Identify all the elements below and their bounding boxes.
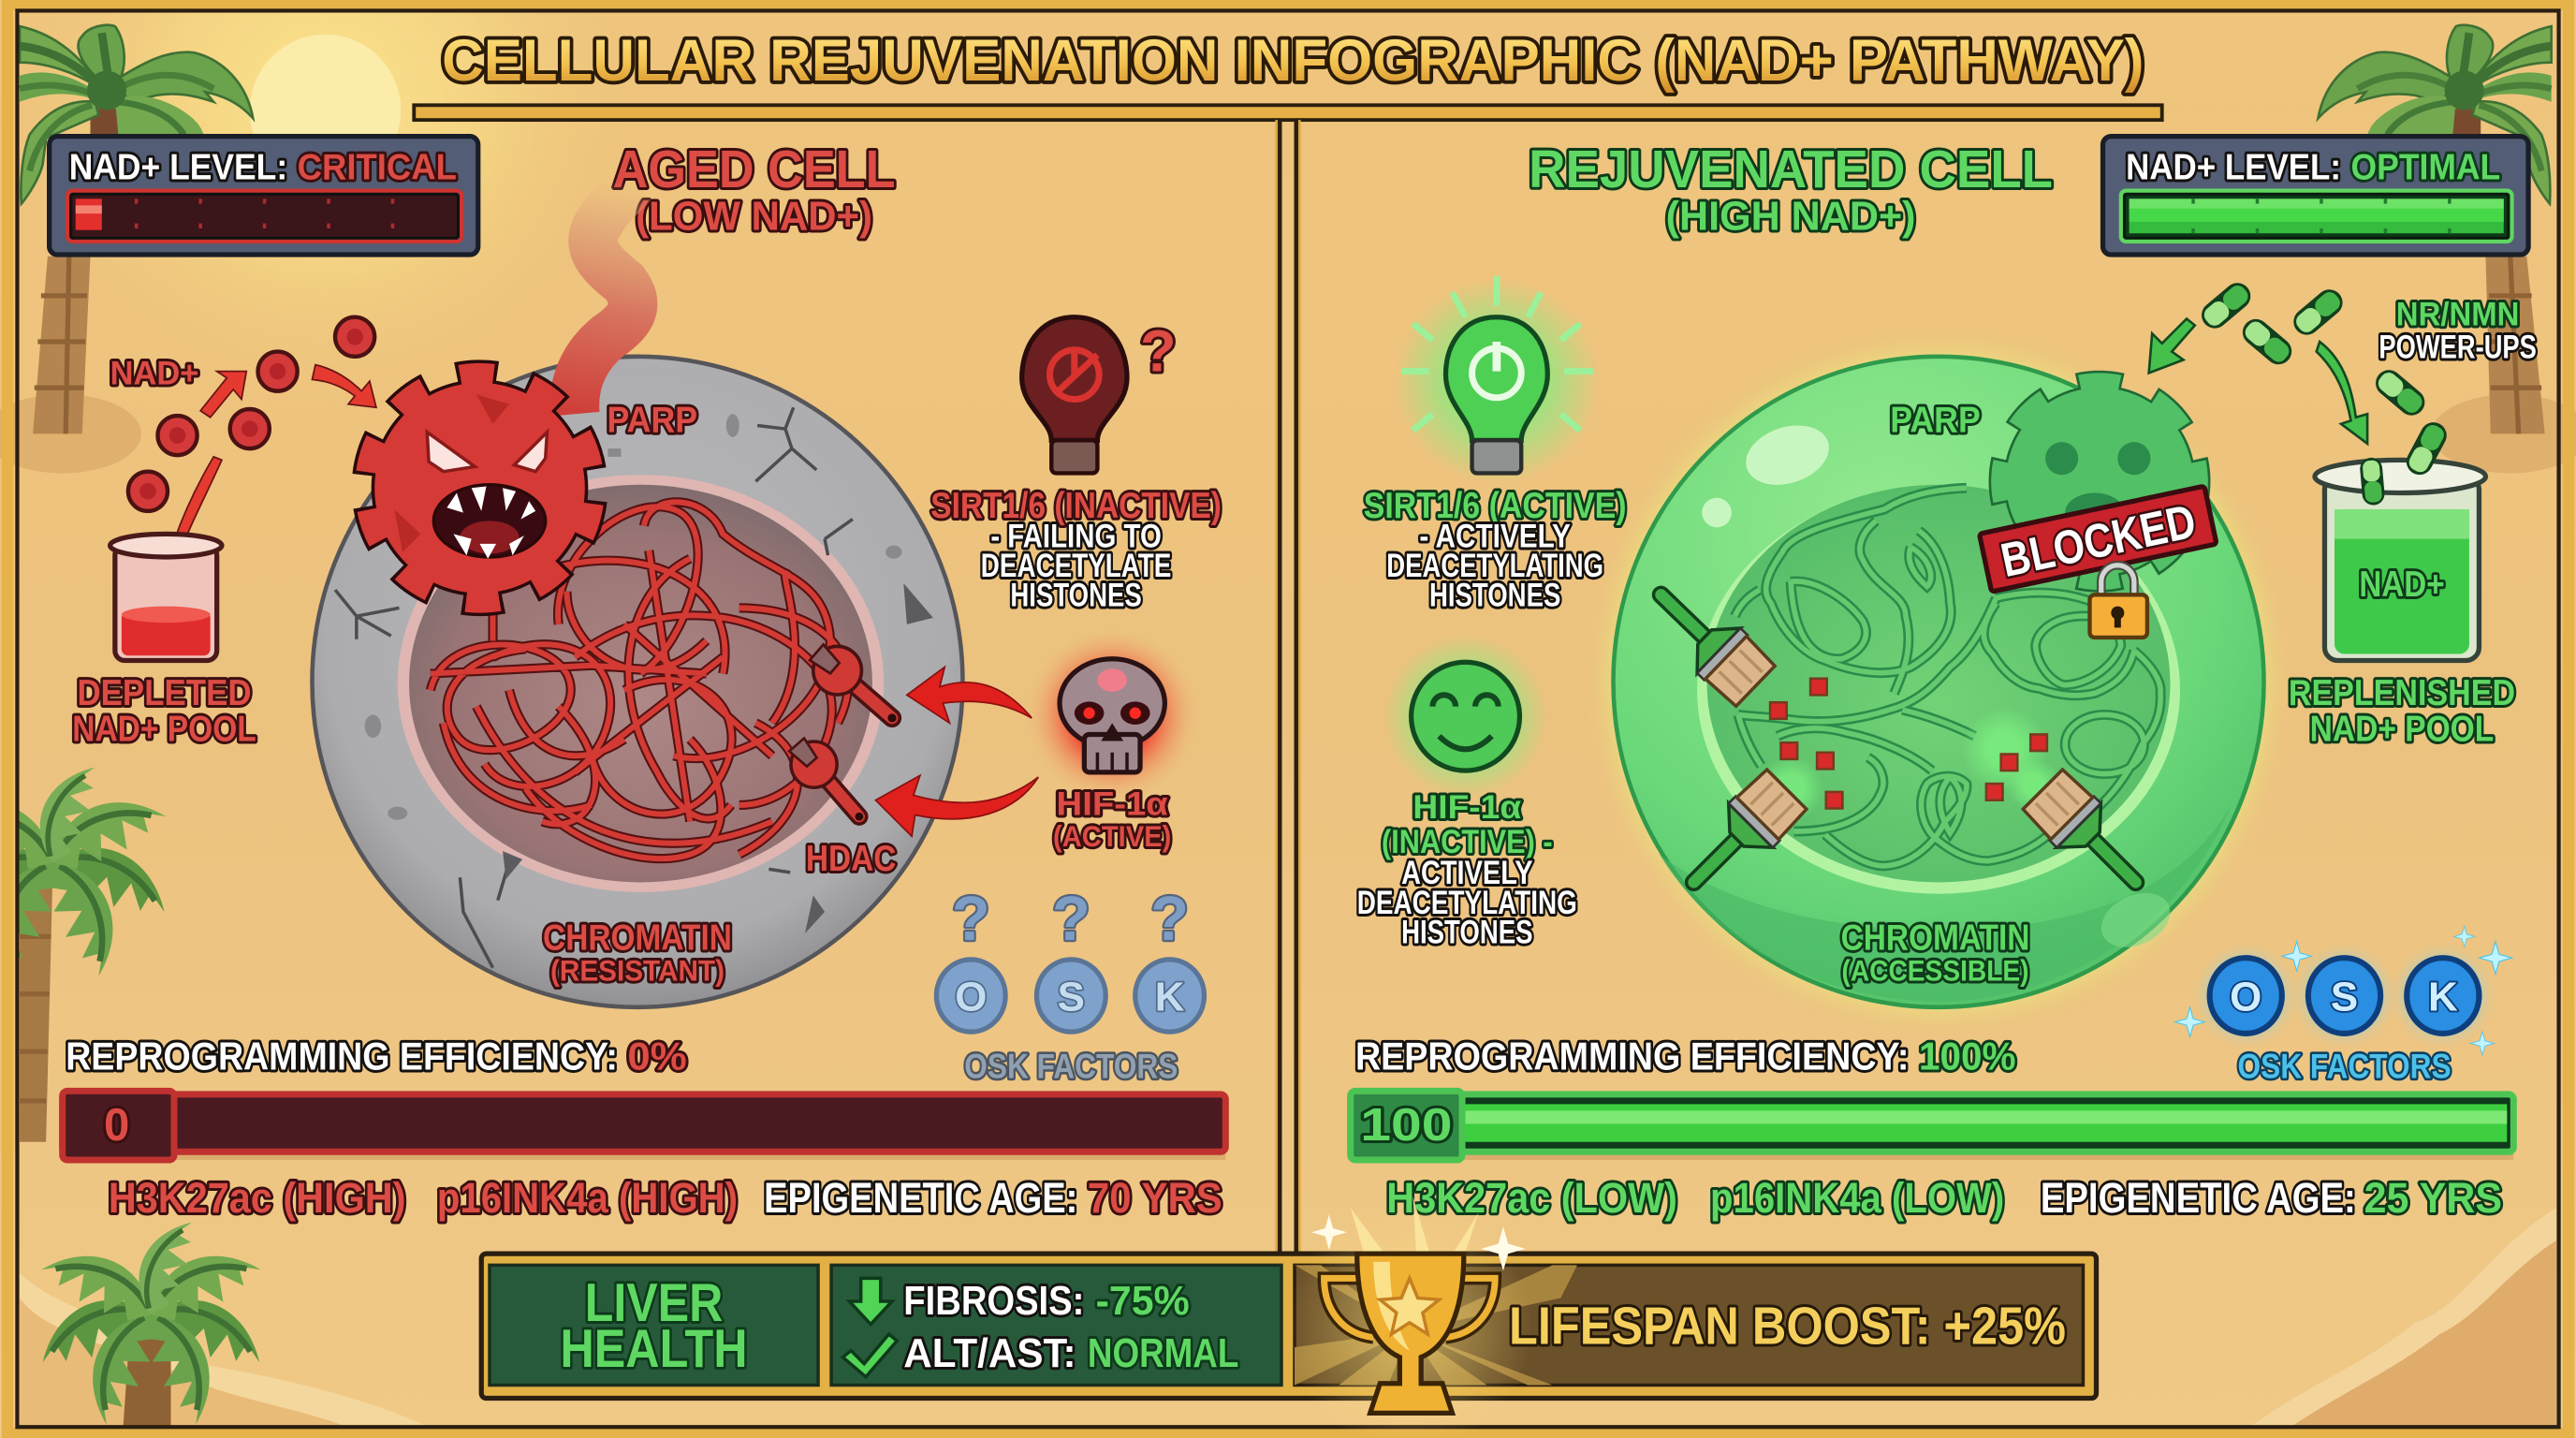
text block: SIRT1/6 active: HISTONES <box>1429 578 1560 614</box>
text block: HIF-1a inactive <box>1357 789 1577 950</box>
icon: replenished beaker <box>2315 418 2485 661</box>
rejuvenated biomarkers: EPIGENETIC AGE: <box>2041 1174 2356 1222</box>
lifespan boost box <box>1286 1204 2083 1438</box>
reprogramming efficiency: 100% <box>1351 1034 2513 1160</box>
label: replenished NAD+ pool: REPLENISHED <box>2289 673 2515 713</box>
panel: bottom results bar <box>481 1196 2097 1438</box>
lifespan boost box: LIFESPAN BOOST: +25% <box>1509 1297 2066 1356</box>
NAD+ level gauge: critical: NAD+ LEVEL: <box>69 147 287 187</box>
label: HDAC: HDAC <box>806 839 896 879</box>
icon: depleted beaker <box>110 534 222 661</box>
rejuvenated biomarkers: H3K27ac (LOW) <box>1386 1174 1677 1222</box>
arrow: HIF-1a to lower wrench <box>875 775 1038 836</box>
label: NR/NMN power-ups: POWER-UPS <box>2378 330 2537 366</box>
liver metrics box <box>831 1265 1281 1385</box>
label: replenished NAD+ pool: NAD+ POOL <box>2310 710 2494 750</box>
liver health box <box>490 1265 818 1385</box>
OSK factors locked: ? <box>952 885 990 954</box>
text block: HIF-1a inactive: HIF-1α <box>1412 789 1522 826</box>
icon: wrench HDAC lower <box>780 729 879 835</box>
icon: glowing lightbulb SIRT1/6 active <box>1395 276 1599 483</box>
icon: NR/NMN pills and arrows <box>2149 278 2430 444</box>
label: replenished NAD+ pool <box>2289 673 2515 750</box>
reprogramming efficiency: 0%: REPROGRAMMING EFFICIENCY: <box>66 1034 618 1078</box>
rejuvenated biomarkers <box>1386 1174 2502 1222</box>
liver health box: HEALTH <box>560 1319 748 1379</box>
bar frame <box>481 1254 2097 1399</box>
PARP monster gear <box>368 376 592 600</box>
label: chromatin accessible: CHROMATIN <box>1841 917 2029 958</box>
icon: histone brushes <box>1639 572 2158 904</box>
rejuvenated cell heading: REJUVENATED CELL <box>1529 139 2053 198</box>
label: HIF-1a active: (ACTIVE) <box>1053 819 1171 853</box>
reprogramming efficiency: 0% <box>63 1034 1225 1160</box>
icon: smiley HIF-1a inactive <box>1383 634 1547 799</box>
icon: trophy with sparkles <box>1311 1196 1526 1413</box>
icon: skull HIF-1a active <box>1023 626 1201 803</box>
accessible cell: green sphere <box>1580 324 2297 1040</box>
resistant cell: cracked stone <box>312 357 962 1007</box>
label: depleted NAD+ pool: DEPLETED <box>77 673 252 713</box>
panel: rejuvenated cell <box>1351 137 2537 1222</box>
smoke rising from PARP <box>575 184 633 414</box>
icon: padlock <box>2089 565 2147 638</box>
OSK factors locked <box>936 885 1204 1085</box>
OSK factors active: S <box>2331 974 2358 1020</box>
text block: SIRT1/6 active: DEACETYLATING <box>1386 548 1603 584</box>
liver metrics box: NORMAL <box>1088 1330 1238 1376</box>
rejuvenated cell heading: (HIGH NAD+) <box>1666 194 1915 240</box>
label: HIF-1a active <box>1053 785 1171 853</box>
NAD+ molecules being consumed <box>110 317 376 572</box>
text block: HIF-1a inactive: (INACTIVE) - <box>1382 824 1553 860</box>
text block: SIRT1/6 active: - ACTIVELY <box>1419 518 1571 554</box>
palm tree: top right <box>2318 25 2552 433</box>
reprogramming efficiency: 100%: 100 <box>1360 1100 1453 1151</box>
NAD+ level gauge: optimal <box>2103 137 2528 255</box>
sparkle glow on chromatin <box>1758 707 2060 822</box>
label: chromatin resistant: (RESISTANT) <box>550 954 724 988</box>
aged biomarkers: 70 YRS <box>1088 1174 1222 1222</box>
rejuvenated biomarkers: 25 YRS <box>2364 1174 2502 1222</box>
aged cell heading: AGED CELL <box>613 139 896 198</box>
aged biomarkers: EPIGENETIC AGE: <box>764 1174 1077 1222</box>
reprogramming efficiency: 0%: 0 <box>104 1100 129 1151</box>
label: HIF-1a active: HIF-1α <box>1057 785 1168 822</box>
text block: HIF-1a inactive: DEACETYLATING <box>1357 885 1577 921</box>
label: chromatin accessible <box>1841 917 2029 988</box>
aged biomarkers <box>109 1174 1222 1222</box>
rejuvenated cell heading <box>1529 139 2053 240</box>
NAD+ level gauge: critical: CRITICAL <box>298 147 457 187</box>
NAD+ level gauge: optimal: OPTIMAL <box>2351 147 2500 187</box>
label: NR/NMN power-ups <box>2378 296 2537 366</box>
text block: SIRT1/6 active <box>1364 486 1627 614</box>
OSK factors locked: O <box>955 974 987 1020</box>
aged cell heading: (LOW NAD+) <box>636 194 872 240</box>
panel: aged cell <box>50 137 1225 1222</box>
text block: SIRT1/6 active: SIRT1/6 (ACTIVE) <box>1364 486 1627 526</box>
text block: SIRT1/6 inactive <box>930 486 1222 614</box>
OSK factors active: O <box>2230 974 2261 1020</box>
label: depleted NAD+ pool: NAD+ POOL <box>72 710 256 750</box>
aged cell heading <box>613 139 896 240</box>
label: chromatin accessible: (ACCESSIBLE) <box>1841 954 2029 988</box>
arrow: HIF-1a to upper wrench <box>907 668 1032 723</box>
icon: dark lightbulb SIRT1/6 inactive: ? <box>1140 319 1177 385</box>
tangled chromatin <box>431 502 848 858</box>
label: chromatin resistant: CHROMATIN <box>543 917 732 958</box>
liver metrics box: -75% <box>1096 1278 1190 1324</box>
palm tree: middle left <box>0 756 178 1151</box>
text block: SIRT1/6 inactive: HISTONES <box>1010 578 1142 614</box>
OSK factors locked: OSK FACTORS <box>964 1047 1178 1085</box>
aged biomarkers: H3K27ac (HIGH) <box>109 1174 406 1222</box>
text block: SIRT1/6 inactive: DEACETYLATE <box>981 548 1171 584</box>
icon: replenished beaker: NAD+ <box>2359 565 2445 605</box>
text block: SIRT1/6 inactive: SIRT1/6 (INACTIVE) <box>930 486 1222 526</box>
title underline and central divider <box>414 105 2162 1252</box>
loose chromatin <box>1734 488 2160 866</box>
OSK factors active: OSK FACTORS <box>2237 1047 2452 1085</box>
title: CELLULAR REJUVENATION INFOGRAPHIC (NAD+ PATHWAY) <box>442 28 2144 94</box>
PARP gear blocked <box>2001 383 2198 580</box>
OSK factors locked: K <box>1155 974 1185 1020</box>
aged biomarkers: p16INK4a (HIGH) <box>437 1174 738 1222</box>
label: PARP: PARP <box>1890 401 1981 441</box>
icon: wrench HDAC upper <box>800 634 911 739</box>
acetyl marks <box>1770 679 2047 808</box>
icon: dark lightbulb SIRT1/6 inactive <box>1022 317 1177 473</box>
rejuvenated biomarkers: p16INK4a (LOW) <box>1710 1174 2004 1222</box>
reprogramming efficiency: 100%: REPROGRAMMING EFFICIENCY: <box>1355 1034 1909 1078</box>
blocked tag: BLOCKED <box>1997 494 2201 587</box>
label: NR/NMN power-ups: NR/NMN <box>2396 296 2519 332</box>
text block: HIF-1a inactive: ACTIVELY <box>1401 855 1533 891</box>
reprogramming efficiency: 100%: 100% <box>1919 1034 2016 1078</box>
palm tree: top left <box>20 25 253 433</box>
label: PARP: PARP <box>607 401 697 441</box>
reprogramming efficiency: 0%: 0% <box>627 1034 687 1078</box>
label: depleted NAD+ pool <box>72 673 256 750</box>
text block: SIRT1/6 inactive: - FAILING TO <box>990 518 1162 554</box>
text block: HIF-1a inactive: HISTONES <box>1401 914 1533 950</box>
OSK factors active: K <box>2428 974 2458 1020</box>
OSK factors locked: ? <box>1052 885 1090 954</box>
liver metrics box: FIBROSIS: <box>903 1278 1084 1324</box>
OSK factors locked: ? <box>1150 885 1189 954</box>
NAD+ level gauge: optimal: NAD+ LEVEL: <box>2126 147 2341 187</box>
palm tree: bottom left <box>30 1211 272 1430</box>
liver health box: LIVER <box>585 1273 723 1333</box>
OSK factors active <box>2175 926 2511 1085</box>
liver metrics box: ALT/AST: <box>903 1330 1076 1376</box>
label: chromatin resistant <box>543 917 732 988</box>
OSK factors locked: S <box>1058 974 1085 1020</box>
NAD+ level gauge: critical <box>50 137 478 255</box>
NAD+ molecules being consumed: NAD+ <box>110 356 198 392</box>
